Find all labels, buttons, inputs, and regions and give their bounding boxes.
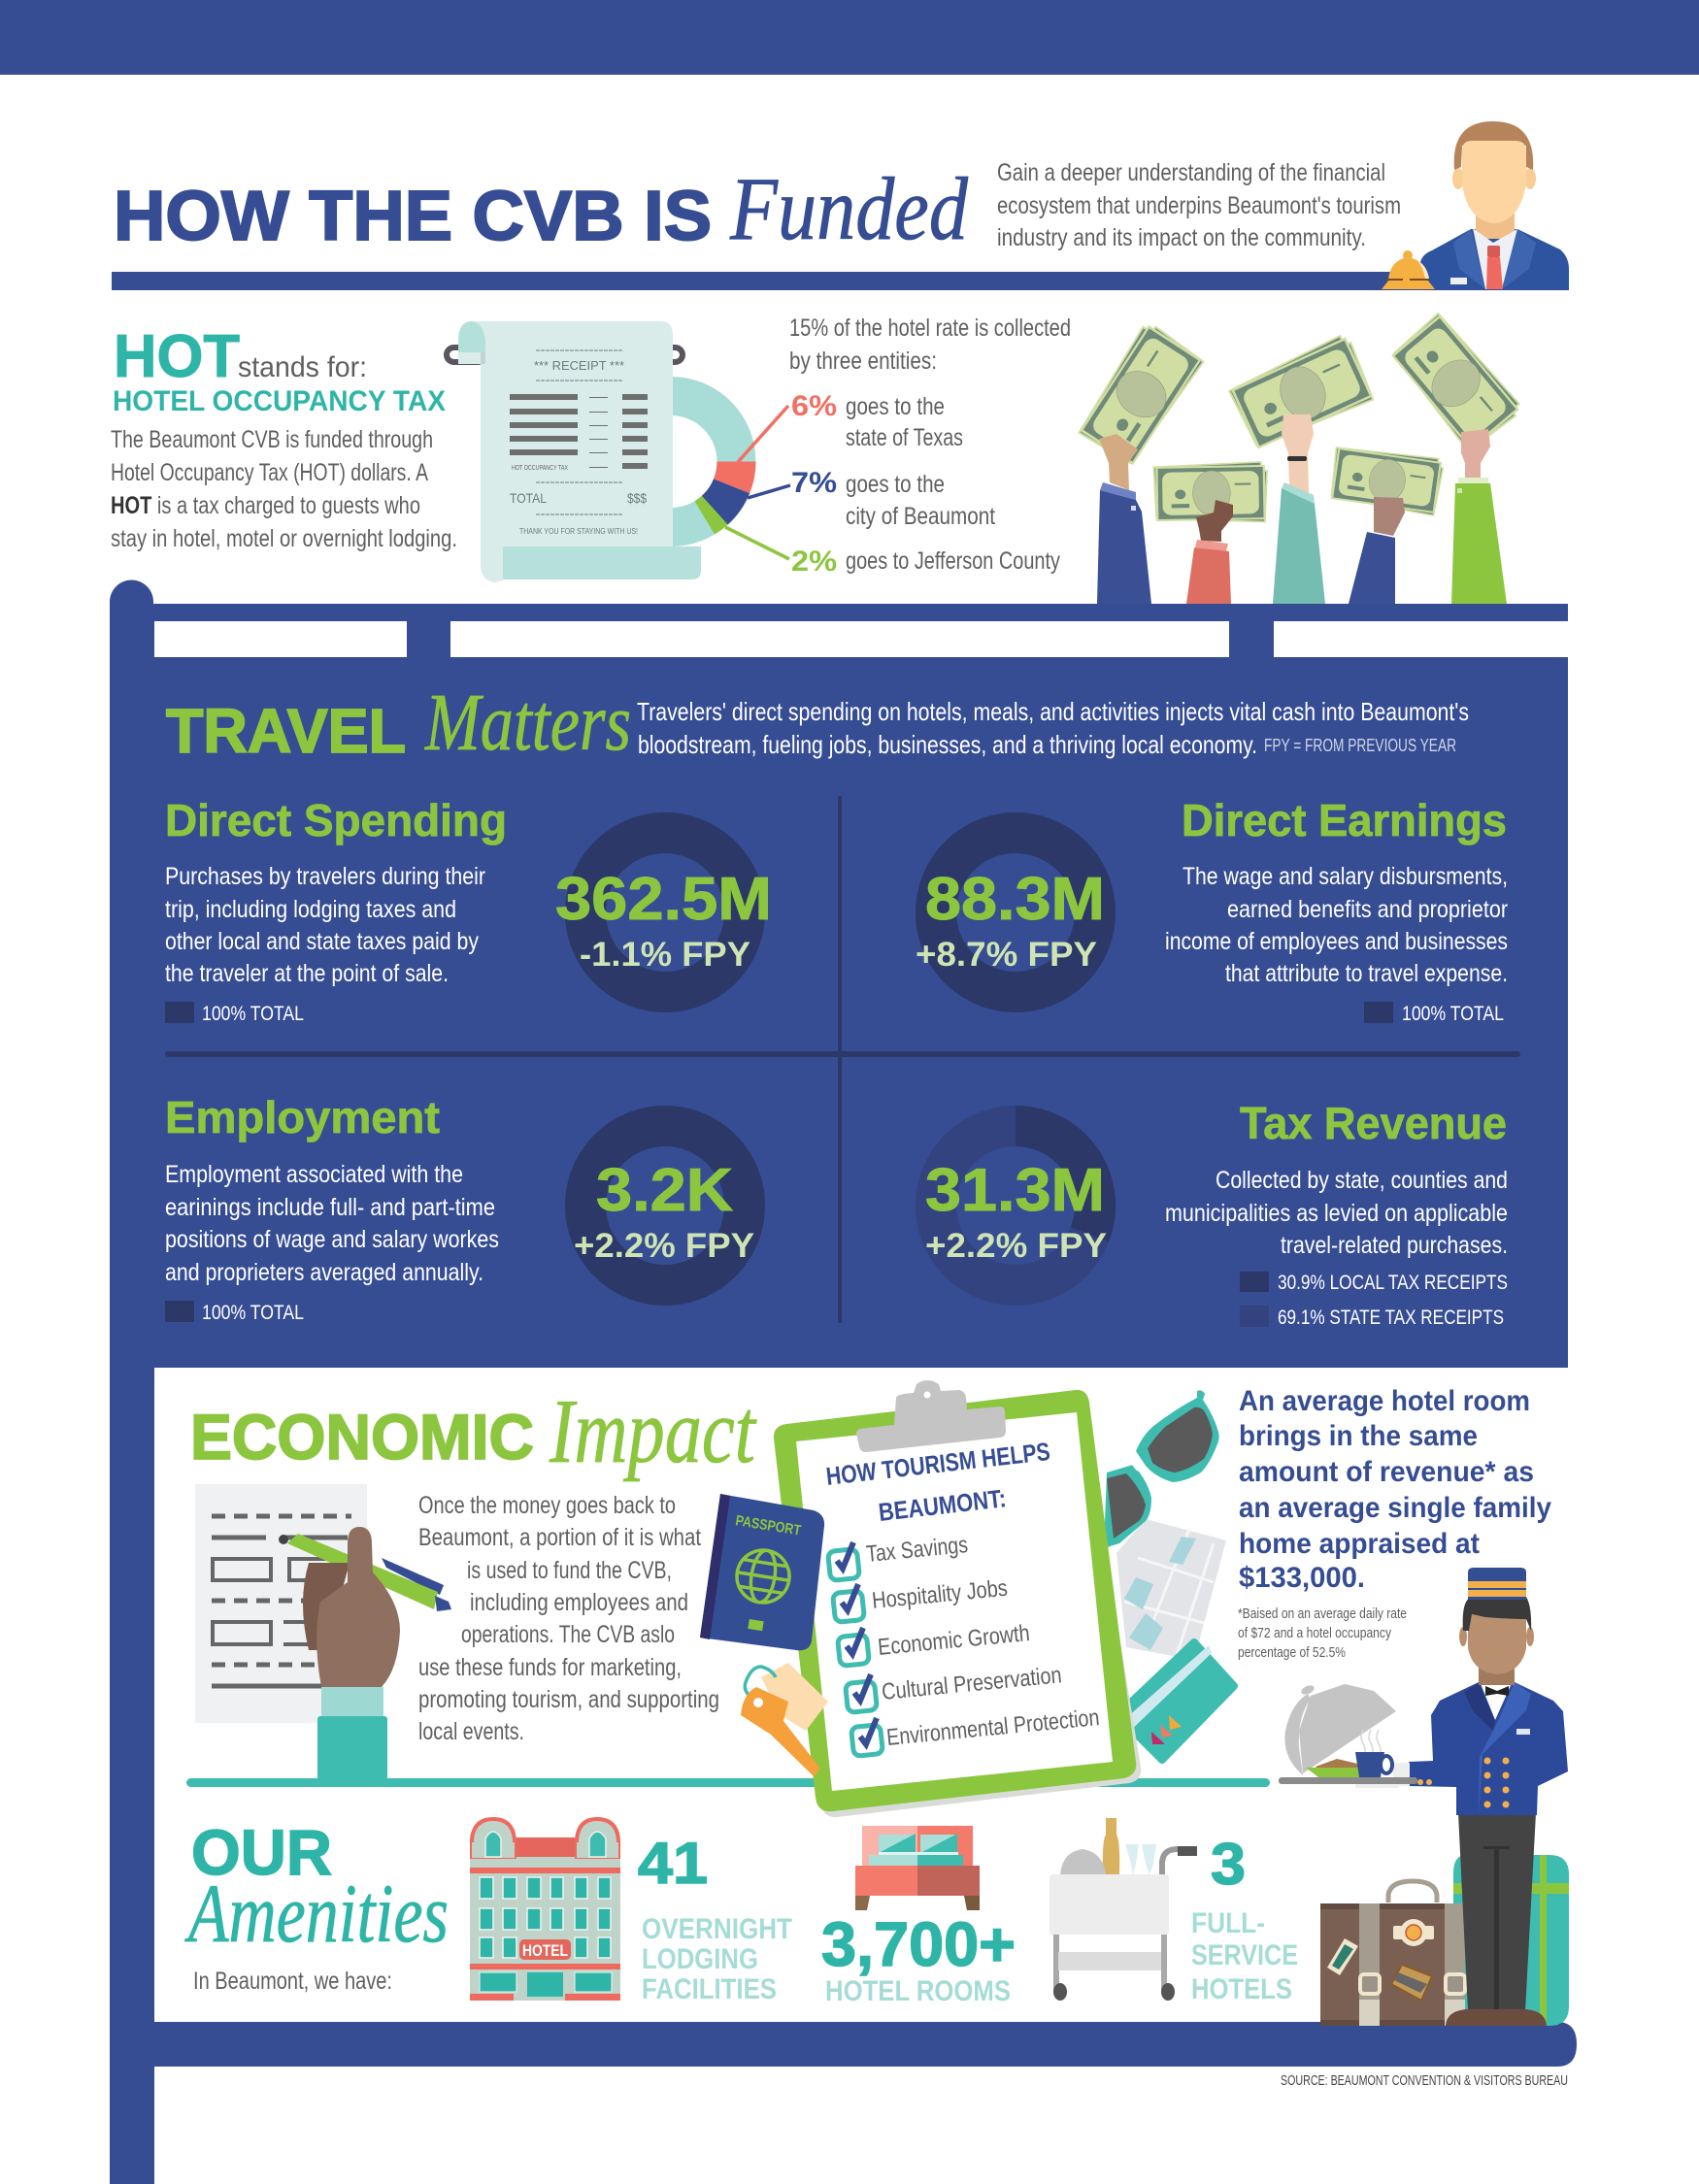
text: footnote: *Baised on an average daily rate [1238,1605,1407,1622]
text: employment body: Employment associated with the [165,1161,463,1188]
header rule [112,272,1569,290]
heading: HOT: HOT [114,323,240,390]
chart: direct spending donut [555,833,772,992]
arm: green sleeve [1451,429,1507,604]
heading: economic impact: ECONOMIC [190,1401,534,1473]
stat: full-service hotels: FULL- [1191,1907,1265,1939]
checklist item: tax savings: Tax Savings [865,1532,969,1568]
text: direct earnings body: income of employees and businesses [1165,928,1508,955]
icon: banknote [1228,333,1376,452]
text: fifteen percent intro: 15% of the hotel rate is collected [789,314,1071,342]
checklist item: hospitality jobs [833,1575,1009,1622]
panel: travel matters [165,678,1520,1329]
heading: direct spending: Direct Spending [165,795,507,845]
heading: how tourism helps beaumont: BEAUMONT: [877,1483,1008,1527]
checklist item: economic growth [838,1620,1031,1666]
text: direct earnings body: earned benefits and proprietor [1227,896,1508,923]
icon: receipt [447,321,701,582]
stat: full-service hotels: 3 [1211,1832,1246,1897]
text: direct spending body: trip, including lodging taxes and [165,896,456,923]
stat: overnight lodging facilities: OVERNIGHT [642,1913,792,1945]
icon: banknote [1153,462,1268,524]
stat: state share: goes to the [846,393,945,420]
icon: concierge man [1420,121,1569,289]
legend: total: 100% TOTAL [202,1302,304,1324]
icon: banknote [1076,321,1205,468]
arm: navy sleeve [1097,434,1151,604]
icon: credit card [1117,1642,1234,1760]
icon: teal suitcase [1453,1855,1569,2026]
icon: receipt: THANK YOU FOR STAYING WITH US! [519,526,638,536]
text: economic impact body: promoting tourism, and supporting [418,1686,719,1713]
icon: keys [741,1663,828,1776]
icon: passport: PASSPORT [734,1512,802,1539]
chart: direct spending donut: -1.1% FPY [580,936,750,974]
legend: total: 100% TOTAL [202,1003,304,1025]
heading: our amenities: Amenities [184,1867,449,1960]
text: hot definition: Hotel Occupancy Tax (HOT) dollars. A [111,459,428,486]
stat: overnight lodging facilities: FACILITIES [642,1973,777,2005]
stat: overnight lodging facilities [638,1831,792,2005]
text: fifteen percent intro [789,314,1071,375]
top banner bar [0,0,1699,75]
icon: receipt: *** RECEIPT *** [534,358,624,373]
quadrant dividers [165,796,1520,1323]
intro text: ecosystem that underpins Beaumont's tourism [997,192,1401,219]
panel: direct earnings [916,795,1508,1025]
illustration: raised hands with money [1076,311,1523,604]
heading: stands for: stands for: [238,351,367,383]
stat: overnight lodging facilities: 41 [638,1831,708,1896]
checklist item: economic growth: Economic Growth [877,1620,1031,1661]
callout: average hotel room: home appraised at [1239,1528,1480,1560]
stat: city share [791,467,995,530]
text: direct earnings body: The wage and salary disbursments, [1183,863,1508,890]
heading: our amenities: OUR [191,1816,332,1888]
text: economic impact body: use these funds for marketing, [418,1654,682,1681]
icon: map [1116,1519,1226,1660]
text: hot definition: The Beaumont CVB is funded through [111,426,433,453]
text: economic impact body: Once the money goes back to [418,1492,676,1519]
heading: tax revenue: Tax Revenue [1240,1098,1507,1148]
stat: state share: state of Texas [846,424,963,451]
chart: hotel tax donut [606,396,790,559]
chart: tax revenue donut: +2.2% FPY [925,1227,1107,1265]
checklist item: cultural preservation [846,1662,1063,1712]
callout: average hotel room: amount of revenue* as [1239,1456,1534,1488]
illustration: clipboard [774,1380,1141,1817]
bottom bar [110,2022,1577,2067]
panel: employment [165,1092,754,1324]
stat: state share: 6% [791,390,837,422]
intro text: Gain a deeper understanding of the financial [997,159,1385,186]
heading: direct earnings: Direct Earnings [1182,795,1507,845]
panel: hot definition [111,323,457,552]
heading: travel matters: Matters [424,678,631,768]
stat: overnight lodging facilities: LODGING [642,1943,758,1975]
intro text: industry and its impact on the community. [997,224,1366,251]
stat: city share: goes to the [846,471,945,498]
heading: travel matters: TRAVEL [166,696,406,766]
text: economic impact body: including employees and [470,1589,688,1616]
stat: full-service hotels [1191,1832,1298,2005]
text: employment body: positions of wage and salary workes [165,1226,499,1253]
stat: hotel rooms: 3,700+ [821,1909,1016,1979]
text: tax revenue body: travel-related purchases. [1281,1232,1508,1259]
icon: receipt: TOTAL [510,490,547,506]
title: Funded [729,159,969,258]
text: employment body: and proprieters averaged annually. [165,1259,483,1286]
icon: banknote [1329,445,1444,516]
callout: average hotel room: brings in the same [1239,1420,1478,1452]
text: tax revenue body [1165,1167,1508,1259]
text: economic impact body [418,1492,719,1745]
icon: room service cart [1049,1818,1197,2001]
icon: banknote [1388,311,1523,453]
legend: total [165,1002,304,1025]
text: source: SOURCE: BEAUMONT CONVENTION & VISITORS BUREAU [1281,2072,1568,2089]
icon: passport [700,1494,824,1650]
callout: average hotel room: an average single family [1239,1492,1551,1524]
heading: our amenities [184,1816,449,1960]
frame bar above travel panel [110,580,1568,2184]
text: employment body: earinings include full- and part-time [165,1194,495,1221]
text: travel description: bloodstream, fueling jobs, businesses, and a thriving local economy. [638,730,1257,759]
chart: direct earnings donut: +8.7% FPY [916,936,1097,974]
heading: how tourism helps beaumont [824,1437,1051,1527]
icon: hotel building [470,1819,620,2001]
text: footnote: of $72 and a hotel occupancy [1238,1625,1391,1641]
text: direct earnings body: that attribute to travel expense. [1225,960,1508,987]
text: hot definition [111,426,457,552]
stat: hotel rooms: HOTEL ROOMS [825,1975,1011,2007]
text: economic impact body: local events. [418,1718,524,1745]
icon: service bell [1382,250,1435,289]
panel: tax revenue [925,1098,1508,1329]
chart: employment donut: +2.2% FPY [574,1227,754,1265]
text: economic impact body: Beaumont, a portion of it is what [418,1524,701,1551]
text: direct spending body: Purchases by travelers during their [165,863,485,890]
checklist item: cultural preservation: Cultural Preservation [881,1662,1063,1705]
text: travel description: Travelers' direct spending on hotels, meals, and activities injects vital cash into Beaumont's [637,697,1469,726]
arm: teal sleeve [1273,414,1325,604]
title [114,159,969,258]
legend: total [1364,1002,1504,1025]
text: economic impact body: operations. The CVB aslo [461,1621,675,1648]
text: in beaumont we have: In Beaumont, we have: [193,1968,392,1995]
heading: economic impact: Impact [549,1381,757,1482]
chart: employment donut: 3.2K [596,1157,733,1224]
chart: tax revenue donut: 31.3M [925,1157,1105,1224]
legend: state tax receipts: 69.1% STATE TAX RECEIPTS [1278,1307,1504,1329]
heading: economic impact [190,1381,757,1482]
callout: average hotel room: $133,000. [1239,1562,1365,1594]
stat: state share [791,390,963,451]
chart: tax revenue donut [925,1126,1107,1285]
heading: travel matters [166,678,631,768]
stat: county share: 2% [791,546,837,578]
panel: direct spending [165,795,772,1025]
legend: total: 100% TOTAL [1402,1003,1504,1025]
teal divider [186,1778,1270,1787]
text: travel description: FPY = FROM PREVIOUS YEAR [1264,736,1456,755]
text: tax revenue body: Collected by state, counties and [1216,1167,1508,1194]
icon: receipt: $$$ [627,490,647,506]
title: HOW THE CVB IS [114,178,712,255]
text: footnote: percentage of 52.5% [1238,1644,1346,1661]
icon: brown suitcase [1320,1881,1465,2026]
icon: clipboard clip [856,1380,1006,1452]
chart: employment donut [574,1126,754,1285]
text: fifteen percent intro: by three entities: [789,347,937,375]
checklist item: hospitality jobs: Hospitality Jobs [871,1575,1009,1614]
text: direct spending body: the traveler at the point of sale. [165,960,449,987]
text: employment body [165,1161,499,1286]
legend: total [165,1301,304,1324]
heading: how tourism helps beaumont: HOW TOURISM HELPS [824,1437,1051,1491]
checklist item: tax savings [828,1532,969,1580]
heading: hotel occupancy tax: HOTEL OCCUPANCY TAX [113,385,446,417]
text: tax revenue body: municipalities as levied on applicable [1165,1200,1508,1227]
illustration: hand filling a form [195,1484,451,1780]
text: travel description [637,697,1469,759]
heading: employment: Employment [165,1092,440,1142]
text: hot definition: stay in hotel, motel or overnight lodging. [111,525,457,552]
stat: city share: 7% [791,467,837,499]
checklist item: environmental protection: Environmental Protection [885,1704,1101,1751]
text: hot definition: HOT is a tax charged to guests who [111,492,420,519]
intro text [997,159,1401,251]
text: economic impact body: is used to fund the CVB, [467,1557,672,1584]
arm: red sleeve [1186,500,1233,604]
icon: bellhop [1409,1568,1568,2026]
text: direct earnings body [1165,863,1508,987]
stat: county share [791,546,1060,578]
stat: city share: city of Beaumont [846,503,995,530]
arm: navy sleeve [1349,497,1405,604]
legend: local tax receipts: 30.9% LOCAL TAX RECEIPTS [1278,1272,1508,1294]
icon: tray with cloche and coffee [1279,1683,1417,1788]
stat: full-service hotels: SERVICE [1191,1939,1298,1971]
chart: direct earnings donut: 88.3M [925,866,1105,933]
stat: county share: goes to Jefferson County [846,547,1060,575]
text: direct spending body [165,863,485,987]
stat: full-service hotels: HOTELS [1191,1973,1292,2005]
chart: direct earnings donut [916,833,1105,992]
text: footnote [1238,1605,1407,1661]
icon: hotel building: HOTEL [522,1941,568,1960]
icon: receipt: HOT OCCUPANCY TAX [512,465,568,472]
icon: bed [855,1826,980,1910]
chart: direct spending donut: 362.5M [555,866,772,933]
text: direct spending body: other local and state taxes paid by [165,928,479,955]
legend: state tax receipts [1240,1306,1504,1329]
callout: average hotel room: An average hotel room [1239,1385,1530,1417]
checklist item: environmental protection [851,1704,1101,1756]
icon: sunglasses [1104,1390,1219,1548]
callout: average hotel room [1239,1385,1551,1594]
